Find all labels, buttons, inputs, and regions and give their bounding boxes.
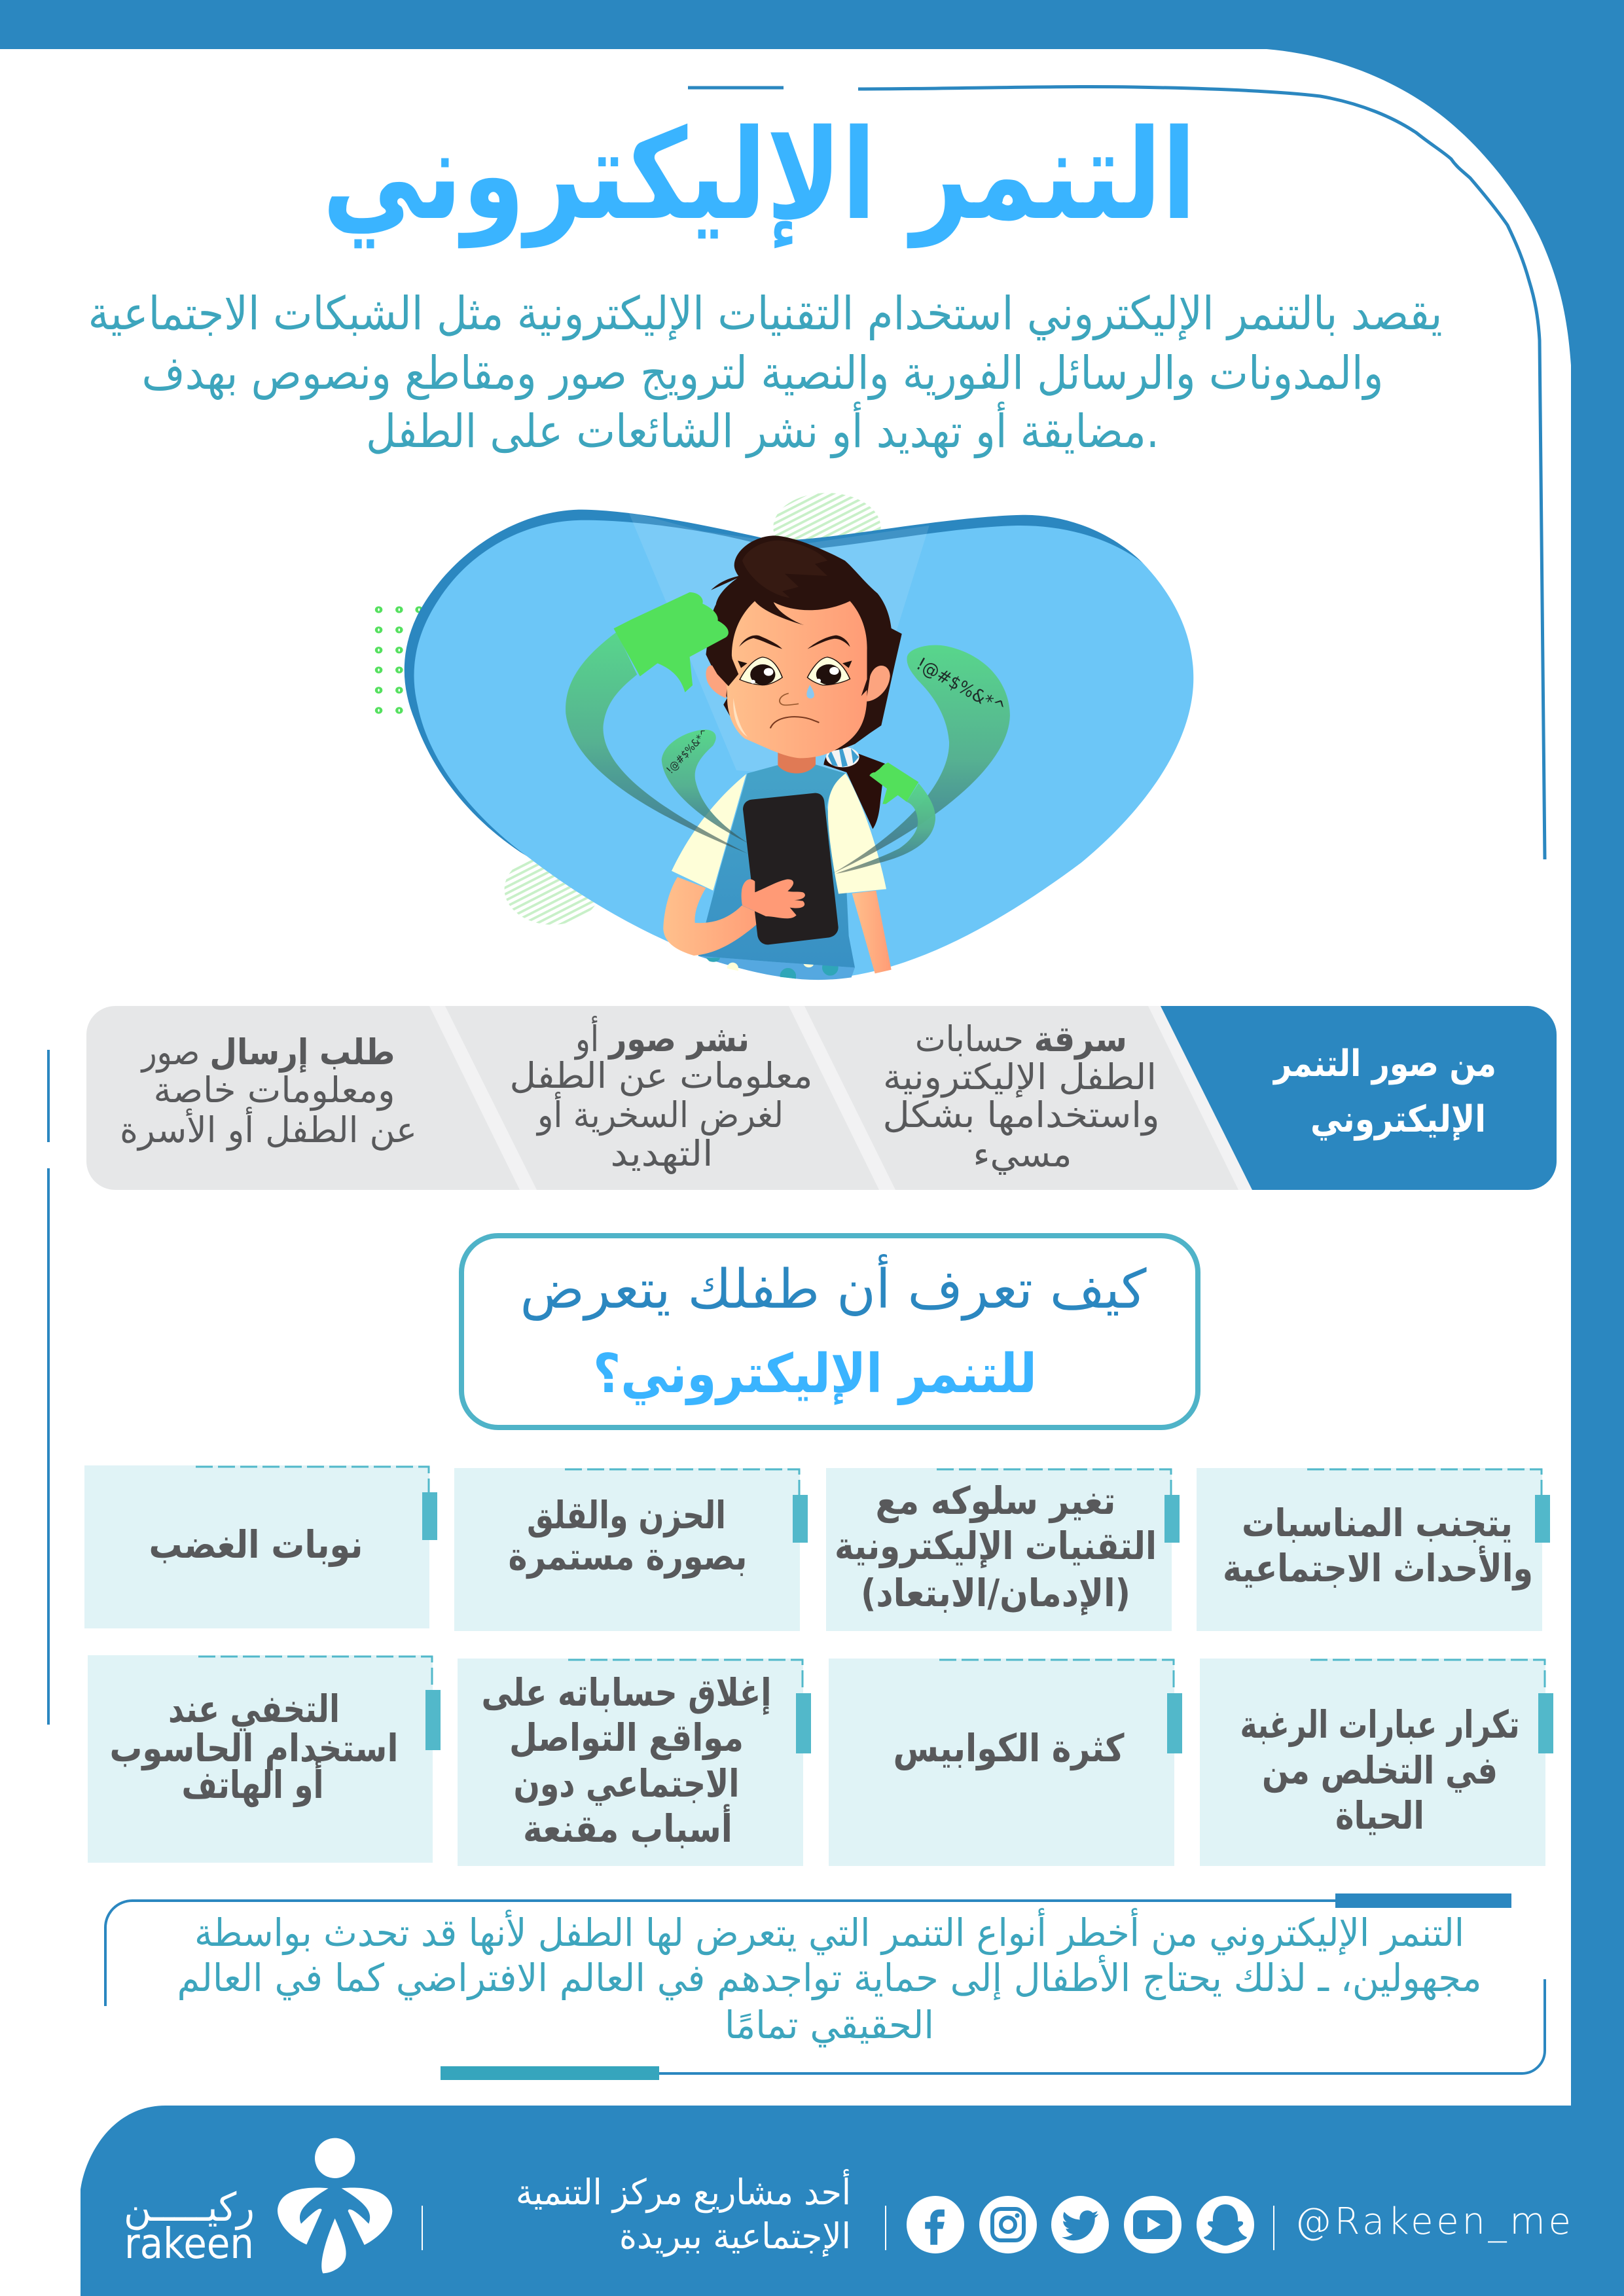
segment: publishing images — [509, 1016, 813, 1174]
closing note panel: مجهولين، ـ لذلك يحتاج الأطفال إلى حماية تواجدهم في العالم الافتراضي كما في العالم — [177, 1954, 1482, 2001]
thumbs down small — [869, 762, 918, 804]
organisation text: أحد مشاريع مركز التنمية — [516, 2169, 851, 2214]
segment: stealing accounts — [882, 1018, 1160, 1175]
card: hiding device: أو الهاتف — [182, 1760, 323, 1808]
segment: publishing images: لغرض السخرية أو — [535, 1092, 784, 1136]
eyes — [738, 657, 852, 685]
icon: snapchat — [1197, 2196, 1254, 2253]
green swirl right small — [836, 783, 935, 874]
card: nightmares: كثرة الكوابيس — [893, 1726, 1125, 1771]
neck — [778, 751, 816, 774]
face — [726, 601, 867, 758]
segment: requesting private images: عن الطفل أو الأسرة — [120, 1107, 417, 1151]
card: avoiding events — [1197, 1468, 1550, 1631]
white lower left margin — [0, 2101, 177, 2296]
segment: stealing accounts: مسيء — [973, 1134, 1072, 1175]
hero illustration: crying child with phone — [376, 493, 1193, 980]
slanted separators — [429, 1006, 1252, 1190]
card: anger outbursts — [84, 1465, 437, 1628]
cheek highlight — [733, 698, 748, 737]
nose and mouth — [770, 693, 819, 728]
card: closing accounts: إغلاق حساباته على — [482, 1670, 771, 1715]
card: anger outbursts: نوبات الغضب — [149, 1522, 363, 1568]
intro paragraph — [88, 287, 1443, 459]
card: sadness and anxiety: بصورة مستمرة — [508, 1534, 748, 1579]
thumbs down large — [614, 592, 729, 692]
blue shirt — [698, 764, 855, 967]
card: avoiding events: والأحداث الاجتماعية — [1223, 1545, 1533, 1591]
symbol text large bubble: !@#$%&*^ — [913, 654, 1009, 719]
organisation text: الإجتماعية ببريدة — [619, 2215, 851, 2257]
skirt with dots — [698, 956, 855, 980]
card: hiding device: استخدام الحاسوب — [110, 1726, 398, 1771]
segment: publishing images: التهديد — [610, 1133, 713, 1174]
panel: forms of cyberbullying band — [86, 1006, 1557, 1190]
right arm — [852, 891, 892, 973]
rakeen logo icon — [278, 2138, 392, 2273]
closing note panel — [105, 1893, 1545, 2080]
segment: stealing accounts: الطفل الإليكترونية — [883, 1056, 1157, 1098]
light blue heart blob — [414, 520, 1193, 979]
segment: requesting private images — [120, 1031, 417, 1151]
blue header segment — [1161, 1006, 1557, 1190]
closing note panel: الحقيقي تمامًا — [725, 2003, 934, 2048]
green swirls — [566, 632, 1010, 873]
card: closing accounts: مواقع التواصل — [509, 1715, 744, 1761]
intro paragraph: والمدونات والرسائل الفورية والنصية لترويج صور ومقاطع ونصوص بهدف — [141, 346, 1384, 401]
card: behaviour change — [826, 1468, 1180, 1631]
left side decorative lines — [47, 1050, 50, 1725]
card: wish to end life — [1200, 1659, 1553, 1866]
card: behaviour change: التقنيات الإليكترونية — [835, 1524, 1157, 1569]
intro paragraph: يقصد بالتنمر الإليكتروني استخدام التقنيات الإليكترونية مثل الشبكات الاجتماعية — [88, 287, 1443, 341]
segment: stealing accounts: سرقة حسابات — [915, 1018, 1127, 1060]
segment: requesting private images: طلب إرسال صور — [140, 1031, 395, 1073]
band heading: الإليكتروني — [1310, 1098, 1486, 1141]
tear drop — [806, 685, 814, 698]
icon: instagram — [979, 2196, 1037, 2253]
translucent light beam — [628, 511, 929, 778]
closing note panel: التنمر الإليكتروني من أخطر أنواع التنمر التي يتعرض لها الطفل لأنها قد تحدث بواسطة — [194, 1908, 1464, 1956]
lighter hair top — [742, 541, 827, 598]
title: التنمر الإليكتروني — [322, 103, 1197, 249]
head — [706, 535, 902, 758]
icon: twitter — [1051, 2196, 1109, 2253]
segment: stealing accounts: واستخدامها بشكل — [882, 1094, 1160, 1136]
black phone — [743, 793, 839, 944]
card: hiding device: التخفي عند — [168, 1687, 340, 1731]
organisation text — [516, 2169, 851, 2257]
left arm — [663, 877, 766, 956]
band heading — [1272, 1043, 1496, 1141]
social handle: @Rakeen_me — [1295, 2200, 1571, 2243]
striped ball — [826, 747, 859, 767]
cream towels — [672, 774, 886, 894]
icon: youtube — [1124, 2196, 1182, 2253]
card: wish to end life: تكرار عبارات الرغبة — [1240, 1702, 1520, 1748]
symbol text small bubble: !@#$%&*^ — [664, 726, 712, 776]
card: avoiding events: يتجنب المناسبات — [1242, 1501, 1513, 1545]
card: wish to end life: في التخلص من — [1262, 1748, 1498, 1793]
card: sadness and anxiety — [454, 1468, 808, 1631]
rakeen latin wordmark: rakeen — [124, 2220, 254, 2269]
card: behaviour change: (الإدمان/الابتعاد) — [861, 1571, 1130, 1616]
rakeen arabic wordmark: ركيـــــن — [124, 2185, 255, 2231]
footer band — [81, 2106, 1624, 2296]
ears — [706, 666, 890, 702]
dark blue blob back — [405, 510, 1143, 933]
card: nightmares — [829, 1659, 1182, 1866]
card: closing accounts — [458, 1659, 811, 1866]
card: hiding device — [88, 1655, 441, 1863]
hand on phone — [742, 879, 805, 918]
segment: publishing images: معلومات عن الطفل — [509, 1055, 813, 1096]
card: closing accounts: أسباب مقنعة — [523, 1804, 732, 1851]
hatched circles — [505, 493, 881, 925]
hair — [706, 535, 902, 753]
card: closing accounts: الاجتماعي دون — [513, 1761, 740, 1806]
footer dividers — [422, 2206, 1274, 2250]
card: behaviour change: تغير سلوكه مع — [876, 1479, 1115, 1524]
question heading box: كيف تعرف أن طفلك يتعرض — [520, 1254, 1147, 1321]
question heading box: للتنمر الإليكتروني؟ — [593, 1343, 1037, 1406]
icon: facebook — [907, 2196, 964, 2253]
card: sadness and anxiety: الحزن والقلق — [527, 1493, 726, 1538]
backpack strap — [823, 748, 885, 829]
green dot grid — [376, 607, 422, 713]
question heading box — [461, 1236, 1198, 1427]
segment: publishing images: نشر صور أو — [573, 1016, 749, 1060]
segment: requesting private images: ومعلومات خاصة — [153, 1069, 395, 1111]
card: wish to end life: الحياة — [1335, 1793, 1424, 1838]
side hair strands — [708, 641, 873, 696]
intro paragraph: .مضايقة أو تهديد أو نشر الشائعات على الطفل — [366, 401, 1159, 459]
eyebrows — [739, 636, 850, 649]
top right outline stroke — [688, 87, 1545, 859]
band heading: من صور التنمر — [1272, 1043, 1496, 1085]
